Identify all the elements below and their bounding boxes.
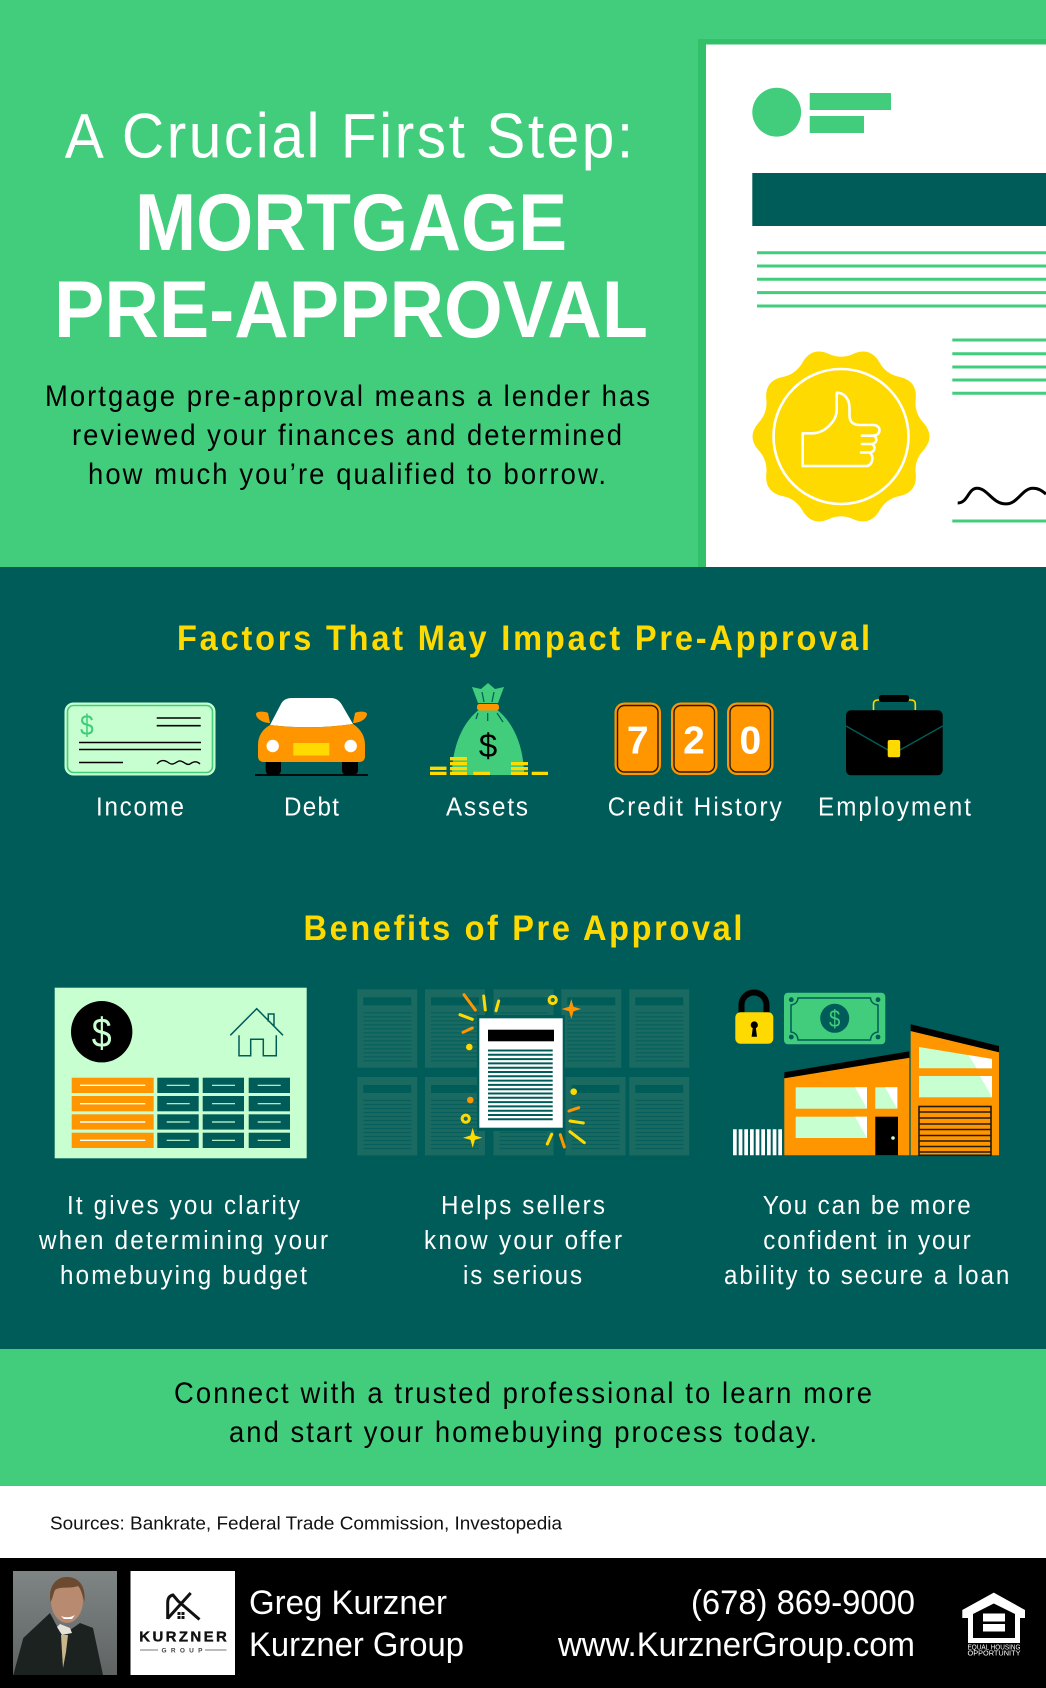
document side lines <box>952 340 1046 393</box>
benefit text: confident in your <box>763 1226 971 1255</box>
call to action band <box>0 1349 1046 1486</box>
title <box>54 101 648 355</box>
heading: factors: Factors That May Impact Pre-Approval <box>177 619 870 658</box>
contact details: www.KurznerGroup.com <box>557 1626 915 1664</box>
icon: equal housing opportunity <box>962 1593 1025 1658</box>
company logo <box>130 1571 235 1675</box>
factor: credit history <box>608 702 782 822</box>
benefit text: when determining your <box>38 1226 328 1255</box>
header panel <box>0 0 1046 567</box>
benefit: serious offer <box>357 989 689 1290</box>
icon: briefcase <box>846 695 943 775</box>
benefit text: It gives you clarity <box>67 1191 300 1220</box>
benefit text: You can be more <box>763 1191 971 1220</box>
illustration: highlighted document <box>357 989 689 1155</box>
factor: assets: Assets <box>446 793 528 822</box>
icon: check: $ <box>80 709 94 741</box>
benefit text: homebuying budget <box>60 1261 307 1290</box>
factor: assets <box>430 683 548 822</box>
intro text <box>45 380 650 491</box>
icon: padlock <box>735 992 773 1044</box>
benefit: confidence <box>724 992 1009 1290</box>
illustration: budget sheet: $ <box>92 1010 112 1057</box>
icon: money bag: $ <box>479 727 497 764</box>
agent photo <box>13 1571 117 1675</box>
logo mark <box>168 1593 200 1620</box>
signature line <box>952 520 1046 522</box>
benefit text: know your offer <box>424 1226 622 1255</box>
benefit text <box>724 1191 1009 1290</box>
benefit text <box>38 1191 328 1290</box>
benefit text <box>424 1191 622 1290</box>
icon: credit score 720: 0 <box>739 720 761 762</box>
icon: fence <box>733 1129 782 1155</box>
document logo <box>752 88 891 137</box>
signature <box>958 488 1046 504</box>
icon: approval seal with thumbs up <box>752 352 930 521</box>
footer band <box>0 1558 1046 1688</box>
factor: income: Income <box>96 793 184 822</box>
document illustration <box>698 39 1046 567</box>
document heading bar <box>752 173 1046 226</box>
company logo: KURZNER <box>139 1628 227 1646</box>
factor: employment: Employment <box>818 793 971 822</box>
sparkles <box>460 995 584 1147</box>
icon: equal housing opportunity: EQUAL HOUSING <box>968 1644 1020 1652</box>
agent name: Kurzner Group <box>249 1626 464 1664</box>
icon: modern house <box>784 1024 999 1155</box>
highlighted document <box>479 1018 563 1128</box>
intro text: Mortgage pre-approval means a lender has <box>45 380 650 413</box>
heading: benefits: Benefits of Pre Approval <box>304 909 742 948</box>
contact details: (678) 869-9000 <box>691 1584 915 1622</box>
title: PRE-APPROVAL <box>54 265 648 355</box>
agent name: Greg Kurzner <box>249 1584 447 1622</box>
icon: car <box>255 698 368 775</box>
background documents <box>357 989 689 1155</box>
contact details <box>557 1584 915 1664</box>
benefit text: Helps sellers <box>441 1191 605 1220</box>
icon: equal housing opportunity: OPPORTUNITY <box>968 1650 1021 1658</box>
call to action band: and start your homebuying process today. <box>229 1416 817 1449</box>
title: A Crucial First Step: <box>65 101 633 171</box>
factor: debt <box>255 698 368 822</box>
benefit text: is serious <box>463 1261 582 1290</box>
factors and benefits panel <box>0 567 1046 1349</box>
icon: dollar bill: $ <box>829 1005 841 1032</box>
title: MORTGAGE <box>135 178 567 268</box>
factor: employment <box>818 695 971 822</box>
icon: credit score 720: 7 <box>627 720 649 762</box>
call to action band: Connect with a trusted professional to learn more <box>174 1377 872 1410</box>
factor: debt: Debt <box>284 793 339 822</box>
icon: credit score 720 <box>614 702 774 775</box>
intro text: how much you’re qualified to borrow. <box>88 458 606 491</box>
icon: check <box>64 702 216 776</box>
benefit: clarity <box>38 988 328 1290</box>
icon: dollar bill <box>784 993 885 1044</box>
illustration: lock, cash and house <box>733 992 999 1155</box>
document text lines <box>757 253 1046 306</box>
icon: credit score 720: 2 <box>683 720 705 762</box>
illustration: budget sheet <box>55 988 307 1158</box>
benefit text: ability to secure a loan <box>724 1261 1009 1290</box>
intro text: reviewed your finances and determined <box>72 419 622 452</box>
agent name <box>249 1584 464 1664</box>
factor: credit history: Credit History <box>608 793 782 822</box>
sources: Sources: Bankrate, Federal Trade Commission, Investopedia <box>50 1514 563 1534</box>
factor: income <box>64 702 216 822</box>
company logo: GROUP <box>162 1647 203 1654</box>
